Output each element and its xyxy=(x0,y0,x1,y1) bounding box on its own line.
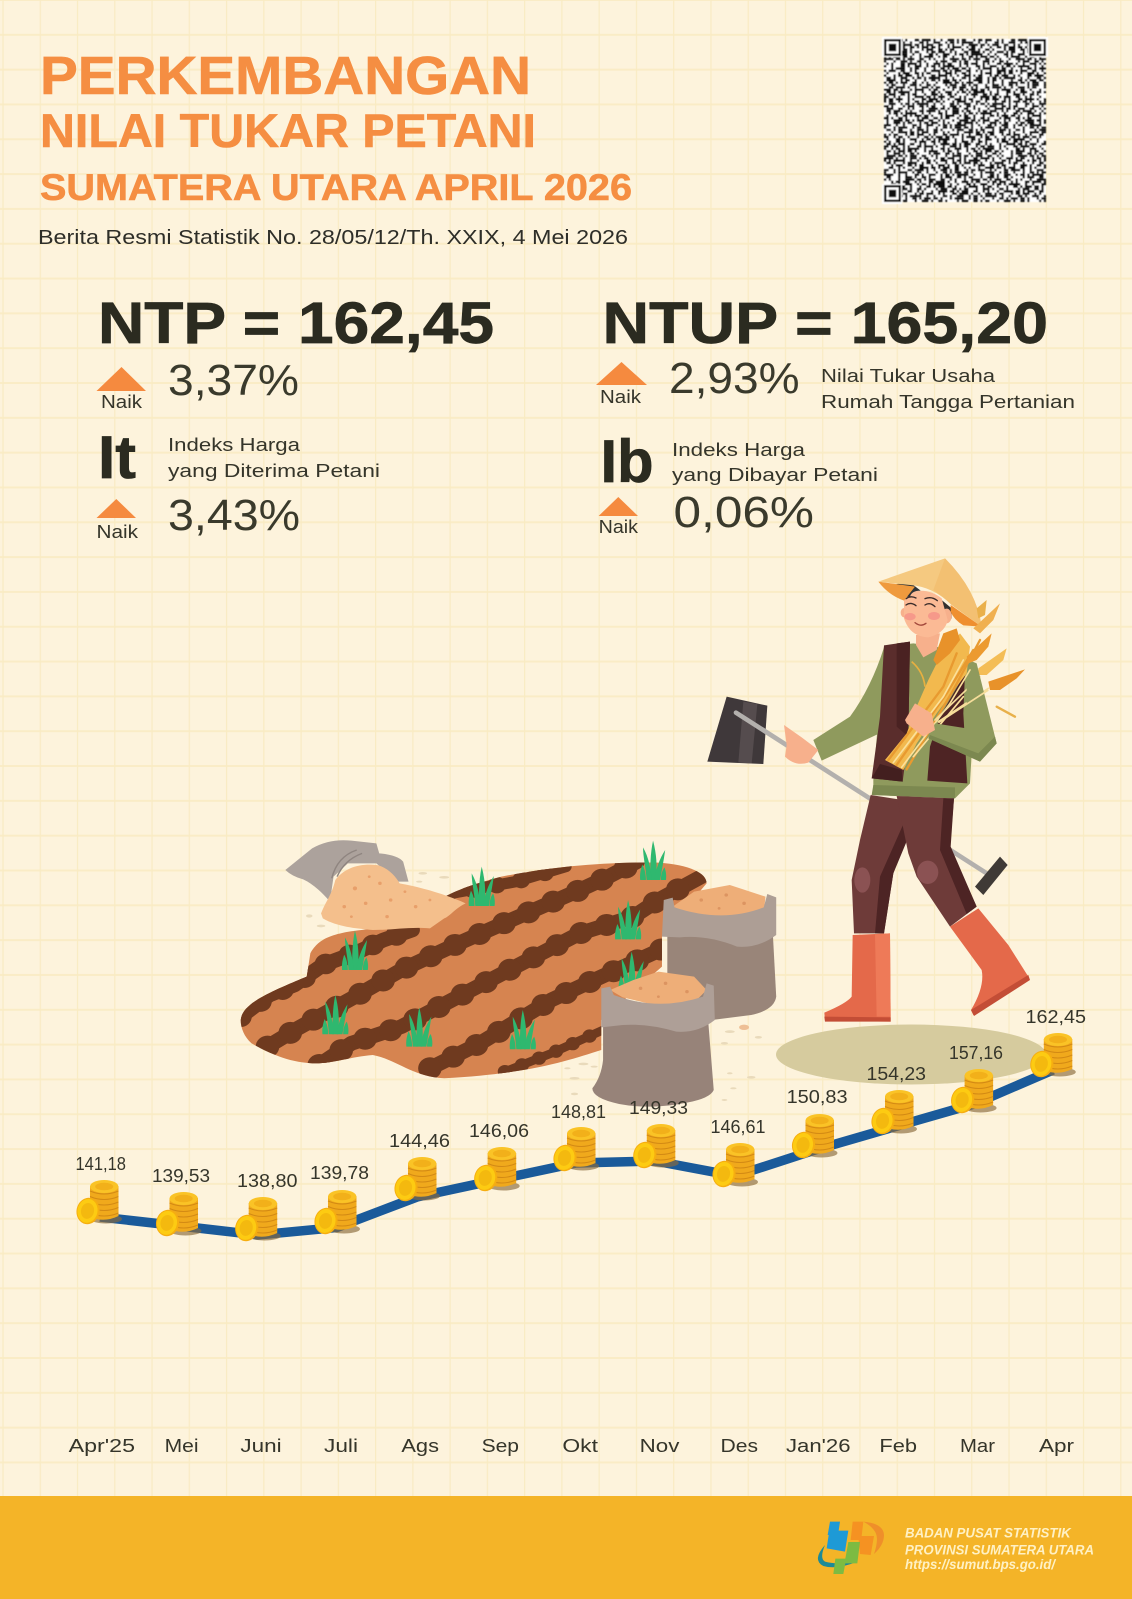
right sleeve xyxy=(928,663,997,762)
data labels: 157,16 xyxy=(949,1042,1003,1063)
month axis labels: Feb xyxy=(879,1435,917,1456)
NTUP description: Rumah Tangga Pertanian xyxy=(821,391,1075,412)
label: Naik: Naik xyxy=(600,386,642,407)
month axis labels: Nov xyxy=(640,1435,680,1456)
month axis labels: Okt xyxy=(562,1435,598,1456)
agency text: BADAN PUSAT STATISTIK xyxy=(905,1526,1072,1541)
hem xyxy=(872,785,955,798)
Ib description: yang Dibayar Petani xyxy=(672,464,878,485)
icon: up triangle xyxy=(599,497,638,516)
front sack xyxy=(592,972,715,1107)
data labels: 154,23 xyxy=(866,1063,926,1084)
wheat bundle xyxy=(885,600,1025,770)
month axis labels: Des xyxy=(720,1435,758,1456)
month axis labels: Apr'25 xyxy=(69,1435,135,1456)
icon: up triangle xyxy=(596,362,647,385)
panel: It xyxy=(96,424,380,542)
It change: 3,43% xyxy=(168,491,300,540)
title line 1: PERKEMBANGAN xyxy=(40,46,531,106)
It symbol: It xyxy=(98,424,136,491)
left hand xyxy=(784,725,818,764)
data labels xyxy=(76,1006,1086,1191)
month axis labels: Mei xyxy=(165,1435,198,1456)
torso xyxy=(873,643,977,798)
NTUP description xyxy=(821,365,1075,412)
illustration: farmer xyxy=(707,558,1030,1022)
Ib description xyxy=(672,439,878,485)
left sleeve xyxy=(813,647,887,761)
panel: Ib xyxy=(599,428,878,537)
month axis labels: Ags xyxy=(401,1435,439,1456)
hoe xyxy=(707,697,1008,895)
label: Naik: Naik xyxy=(101,391,143,412)
neck xyxy=(916,633,940,657)
month axis labels: Apr xyxy=(1039,1435,1074,1456)
month axis labels: Jan'26 xyxy=(786,1435,850,1456)
It description: Indeks Harga xyxy=(168,434,301,455)
footer band xyxy=(0,1496,1132,1599)
label: Naik: Naik xyxy=(599,516,639,537)
data labels: 146,61 xyxy=(710,1116,766,1137)
agency text: https://sumut.bps.go.id/ xyxy=(905,1557,1056,1572)
NTP value: NTP = 162,45 xyxy=(98,291,494,356)
Ib change: 0,06% xyxy=(674,488,814,537)
data labels: 144,46 xyxy=(389,1130,450,1151)
month axis labels: Mar xyxy=(960,1435,995,1456)
spilled sack xyxy=(285,840,466,930)
title line 2: NILAI TUKAR PETANI xyxy=(40,104,536,157)
trend line xyxy=(100,1070,1053,1235)
collar cord xyxy=(912,662,925,687)
month axis labels: Juli xyxy=(324,1435,358,1456)
data labels: 162,45 xyxy=(1026,1006,1086,1027)
month axis labels: Sep xyxy=(482,1435,519,1456)
trousers xyxy=(852,795,977,933)
field xyxy=(241,863,707,1078)
BPS logo xyxy=(818,1522,884,1574)
NTP change: 3,37% xyxy=(168,356,299,405)
data labels: 141,18 xyxy=(76,1153,126,1174)
icon: up triangle xyxy=(96,367,146,391)
data labels: 139,78 xyxy=(310,1162,369,1183)
boots xyxy=(824,908,1030,1022)
data labels: 150,83 xyxy=(787,1086,848,1107)
illustration: soil field, sacks and sprouts xyxy=(241,840,776,1107)
right hand xyxy=(905,703,935,737)
scattered grains xyxy=(306,872,762,1101)
NTUP change: 2,93% xyxy=(669,354,800,403)
data labels: 149,33 xyxy=(629,1097,688,1118)
data labels: 139,53 xyxy=(152,1165,210,1186)
QR finder patterns xyxy=(882,37,1048,204)
agency text xyxy=(905,1526,1094,1572)
It description xyxy=(168,434,380,481)
sprouts xyxy=(322,841,666,1049)
NTUP value: NTUP = 165,20 xyxy=(602,291,1048,356)
source line: Berita Resmi Statistik No. 28/05/12/Th. XXIX, 4 Mei 2026 xyxy=(38,227,628,249)
title line 3: SUMATERA UTARA APRIL 2026 xyxy=(40,166,632,208)
furrows xyxy=(241,862,701,1072)
month axis labels: Juni xyxy=(240,1435,282,1456)
data labels: 148,81 xyxy=(551,1101,606,1122)
data labels: 138,80 xyxy=(237,1170,298,1191)
NTUP description: Nilai Tukar Usaha xyxy=(821,365,996,386)
panel: NTUP xyxy=(596,291,1075,412)
QR code xyxy=(882,37,1048,204)
label: Naik: Naik xyxy=(96,521,139,542)
back sack xyxy=(662,885,776,1020)
Ib symbol: Ib xyxy=(600,428,654,495)
illustration: ground shadow xyxy=(776,1024,1046,1084)
agency text: PROVINSI SUMATERA UTARA xyxy=(905,1543,1094,1558)
panel: NTP xyxy=(96,291,494,412)
vest xyxy=(872,642,967,783)
title block xyxy=(38,46,632,249)
coin stacks xyxy=(74,1033,1076,1243)
line chart xyxy=(69,1006,1086,1456)
month axis labels xyxy=(69,1435,1074,1456)
Ib description: Indeks Harga xyxy=(672,439,806,460)
stalks over sleeve xyxy=(938,690,988,723)
icon: up triangle xyxy=(96,499,136,518)
face and hat xyxy=(878,558,982,637)
It description: yang Diterima Petani xyxy=(168,460,380,481)
data labels: 146,06 xyxy=(469,1120,529,1141)
